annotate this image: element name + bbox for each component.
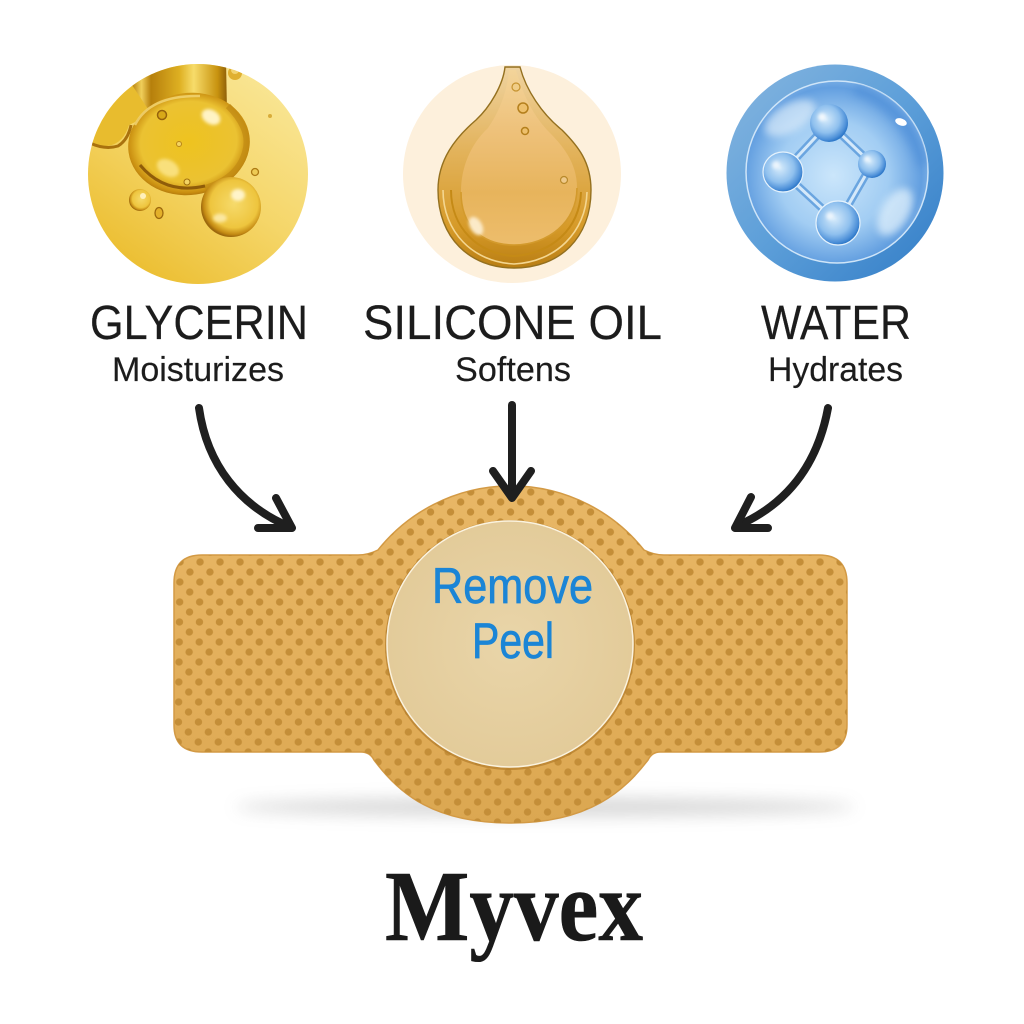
label: glycerin: Moisturizes [112,351,284,389]
label: glycerin: GLYCERIN [90,297,308,350]
patch ground shadow [235,798,855,816]
icon: glycerin bubbles [80,60,308,284]
label: silicone oil: SILICONE OIL [363,297,662,350]
label: water: WATER [761,297,911,350]
icon: silicone oil drop [403,65,621,283]
arrow: water to patch [735,408,828,528]
patch: silicone scar strip [174,486,847,823]
arrow: glycerin to patch [199,408,292,528]
label: silicone oil: Softens [455,351,571,389]
peel disc: Remove [432,558,593,614]
label: water [761,297,911,389]
label: silicone oil [363,297,662,389]
brand logo: Myvex [385,850,643,962]
icon: water molecule [726,64,944,282]
label: water: Hydrates [768,351,903,389]
label: glycerin [90,297,308,389]
peel disc [385,520,635,770]
arrow: silicone oil to patch [493,405,531,498]
peel disc: Peel [472,613,554,669]
